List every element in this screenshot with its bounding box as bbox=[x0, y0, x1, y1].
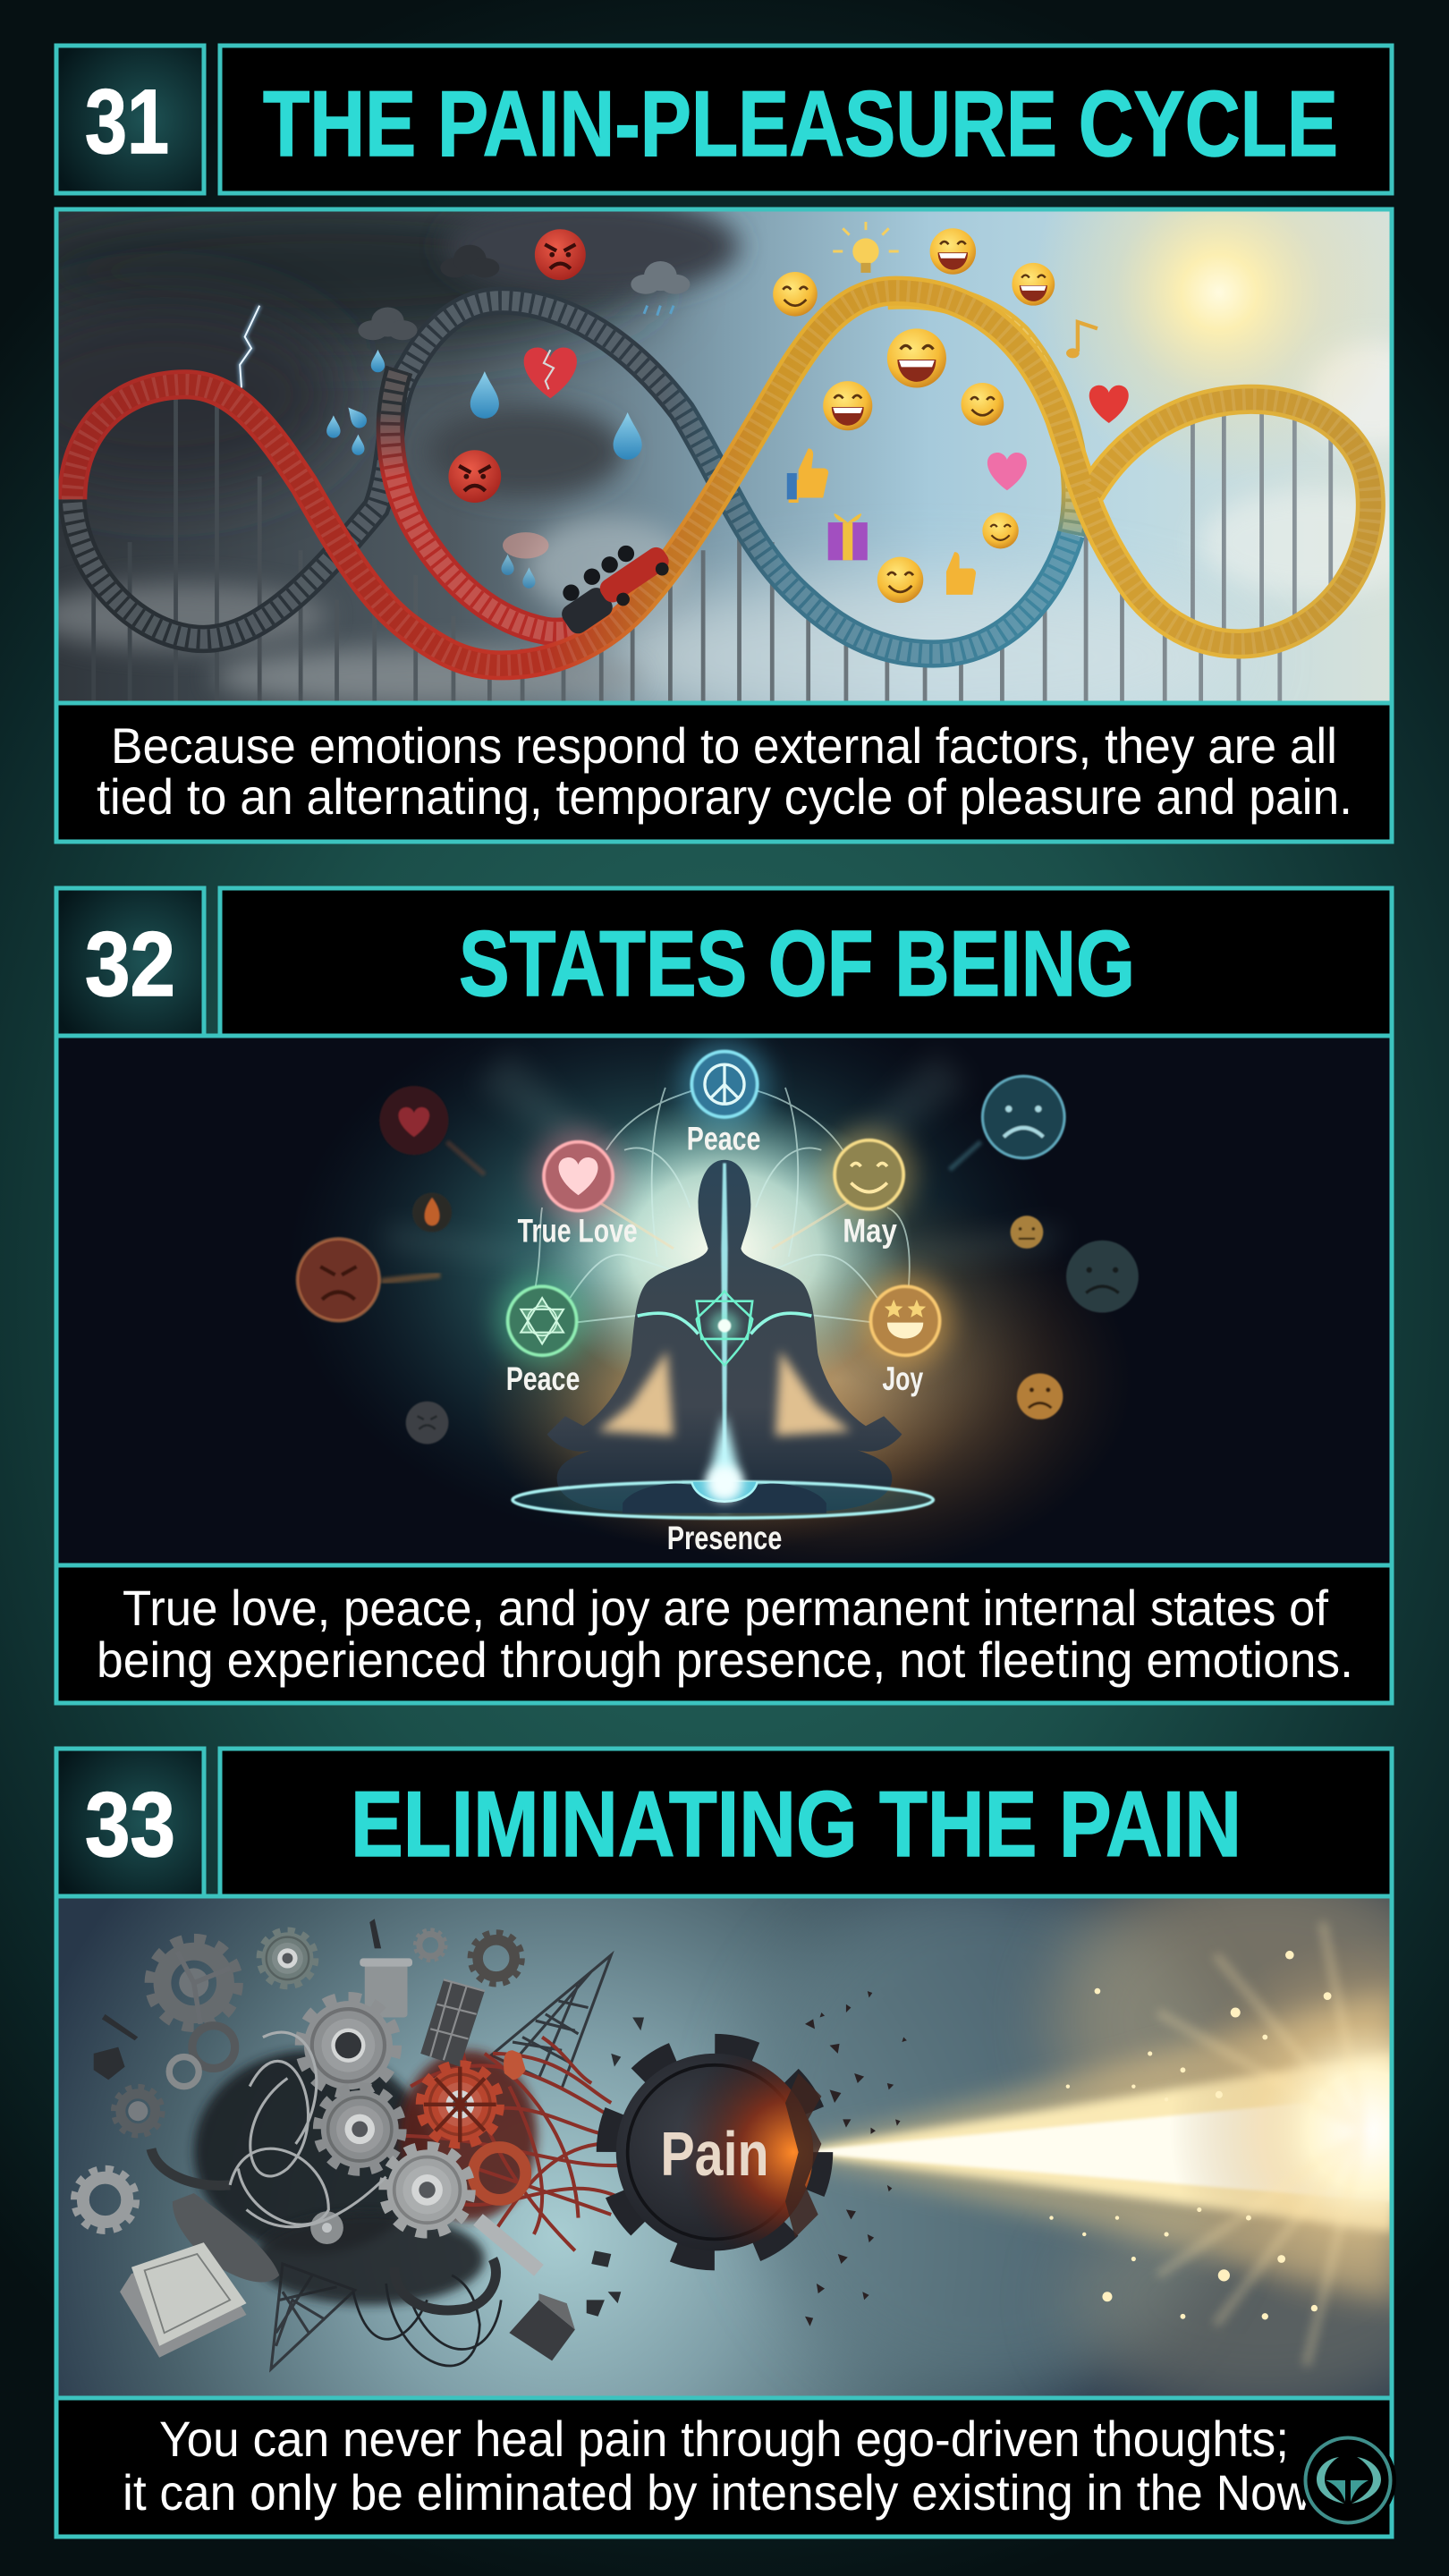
coaster track: dark to blue strand bbox=[72, 295, 1075, 654]
icons: pain emojis bbox=[448, 229, 586, 503]
illustration: meditating figure with states bbox=[59, 1038, 1390, 1563]
icons: storm clouds and tears bbox=[326, 245, 690, 589]
light rays bbox=[391, 1056, 1057, 1258]
mesh plate bbox=[173, 2193, 279, 2282]
coaster car bbox=[562, 546, 669, 633]
fleeting emotions: left bbox=[297, 1086, 485, 1444]
frame bbox=[56, 1036, 1392, 1565]
canister and mesh cylinder bbox=[360, 1958, 485, 2067]
panel: 32 states of being bbox=[49, 888, 1404, 1703]
number badge 33: 33 bbox=[85, 1774, 175, 1876]
dark machine mass bbox=[194, 2050, 430, 2254]
dark arc bbox=[151, 2148, 230, 2185]
caption 32: being experienced through presence, not fleeting emotions. bbox=[97, 1631, 1353, 1688]
caption 31 bbox=[56, 703, 1392, 842]
gray wires bbox=[230, 2032, 386, 2227]
book bbox=[120, 2242, 247, 2358]
state: peace mandala: Peace bbox=[506, 1360, 580, 1397]
number badge 31 bbox=[56, 46, 204, 193]
frame bbox=[56, 209, 1392, 703]
number badge 33 bbox=[56, 1749, 204, 1896]
state: joy: Joy bbox=[882, 1360, 924, 1397]
lattice towers bbox=[271, 1955, 611, 2369]
meditating silhouette bbox=[513, 1160, 933, 1518]
icons: pleasure emojis bbox=[773, 222, 1129, 603]
state: peace: Peace bbox=[687, 1121, 760, 1157]
coaster track: red inner strand bbox=[390, 369, 611, 631]
shattered fragments bbox=[805, 1991, 907, 2326]
pipe bbox=[478, 2219, 538, 2270]
fleeting emotions: right bbox=[950, 1076, 1139, 1419]
pain gear bbox=[613, 2050, 821, 2254]
number badge 32 bbox=[56, 888, 204, 1036]
caption 33: it can only be eliminated by intensely existing in the Now. bbox=[123, 2464, 1322, 2521]
state: joy bbox=[860, 1275, 951, 1397]
state: peace mandala bbox=[496, 1275, 589, 1397]
coaster track: red to gold strand bbox=[72, 291, 1370, 665]
caption 32: True love, peace, and joy are permanent internal states of bbox=[123, 1580, 1328, 1636]
frame bbox=[56, 1896, 1392, 2398]
debris fragments bbox=[94, 1919, 644, 2317]
caption 33: You can never heal pain through ego-driven thoughts; bbox=[159, 2411, 1289, 2467]
caption 32 bbox=[56, 1565, 1392, 1703]
panel: 33 eliminating the pain bbox=[49, 1749, 1449, 2537]
logo badge bbox=[1300, 2432, 1396, 2529]
heading: the pain-pleasure cycle bbox=[220, 46, 1392, 193]
number badge 31: 31 bbox=[85, 71, 169, 173]
state: may bbox=[823, 1129, 915, 1250]
red wires bbox=[394, 2038, 628, 2250]
pain label: Pain bbox=[660, 2119, 769, 2189]
state: peace bbox=[680, 1040, 769, 1157]
connection arcs bbox=[536, 1088, 910, 1323]
sparks bbox=[1049, 1951, 1331, 2319]
heart flower symbol bbox=[638, 1292, 811, 1365]
panel: 31 the pain-pleasure cycle bbox=[0, 46, 1437, 842]
caption 31: tied to an alternating, temporary cycle of pleasure and pain. bbox=[97, 768, 1352, 825]
state: true love bbox=[518, 1131, 638, 1250]
heading: states of being: STATES OF BEING bbox=[459, 912, 1135, 1016]
illustration: pain gear destroyed by beam bbox=[49, 1857, 1449, 2415]
debris cube bbox=[509, 2293, 575, 2360]
state: may: May bbox=[843, 1213, 897, 1250]
illustration: emotional roller coaster bbox=[59, 211, 1390, 701]
gears bbox=[75, 1930, 526, 2244]
caption 31: Because emotions respond to external factors, they are all bbox=[111, 717, 1337, 774]
light beam bbox=[785, 1922, 1449, 2366]
coaster supports bbox=[94, 394, 1331, 701]
icon: lightning bolt bbox=[240, 306, 259, 387]
number badge 32: 32 bbox=[85, 913, 175, 1015]
caption 33 bbox=[56, 2398, 1392, 2537]
heading: eliminating the pain bbox=[220, 1749, 1392, 1896]
heading: eliminating the pain: ELIMINATING THE PAIN bbox=[351, 1773, 1241, 1877]
label: presence: Presence bbox=[667, 1520, 782, 1556]
state: true love: True Love bbox=[518, 1213, 638, 1250]
heading: states of being bbox=[220, 888, 1392, 1036]
energy line and ring bbox=[707, 1413, 742, 1512]
